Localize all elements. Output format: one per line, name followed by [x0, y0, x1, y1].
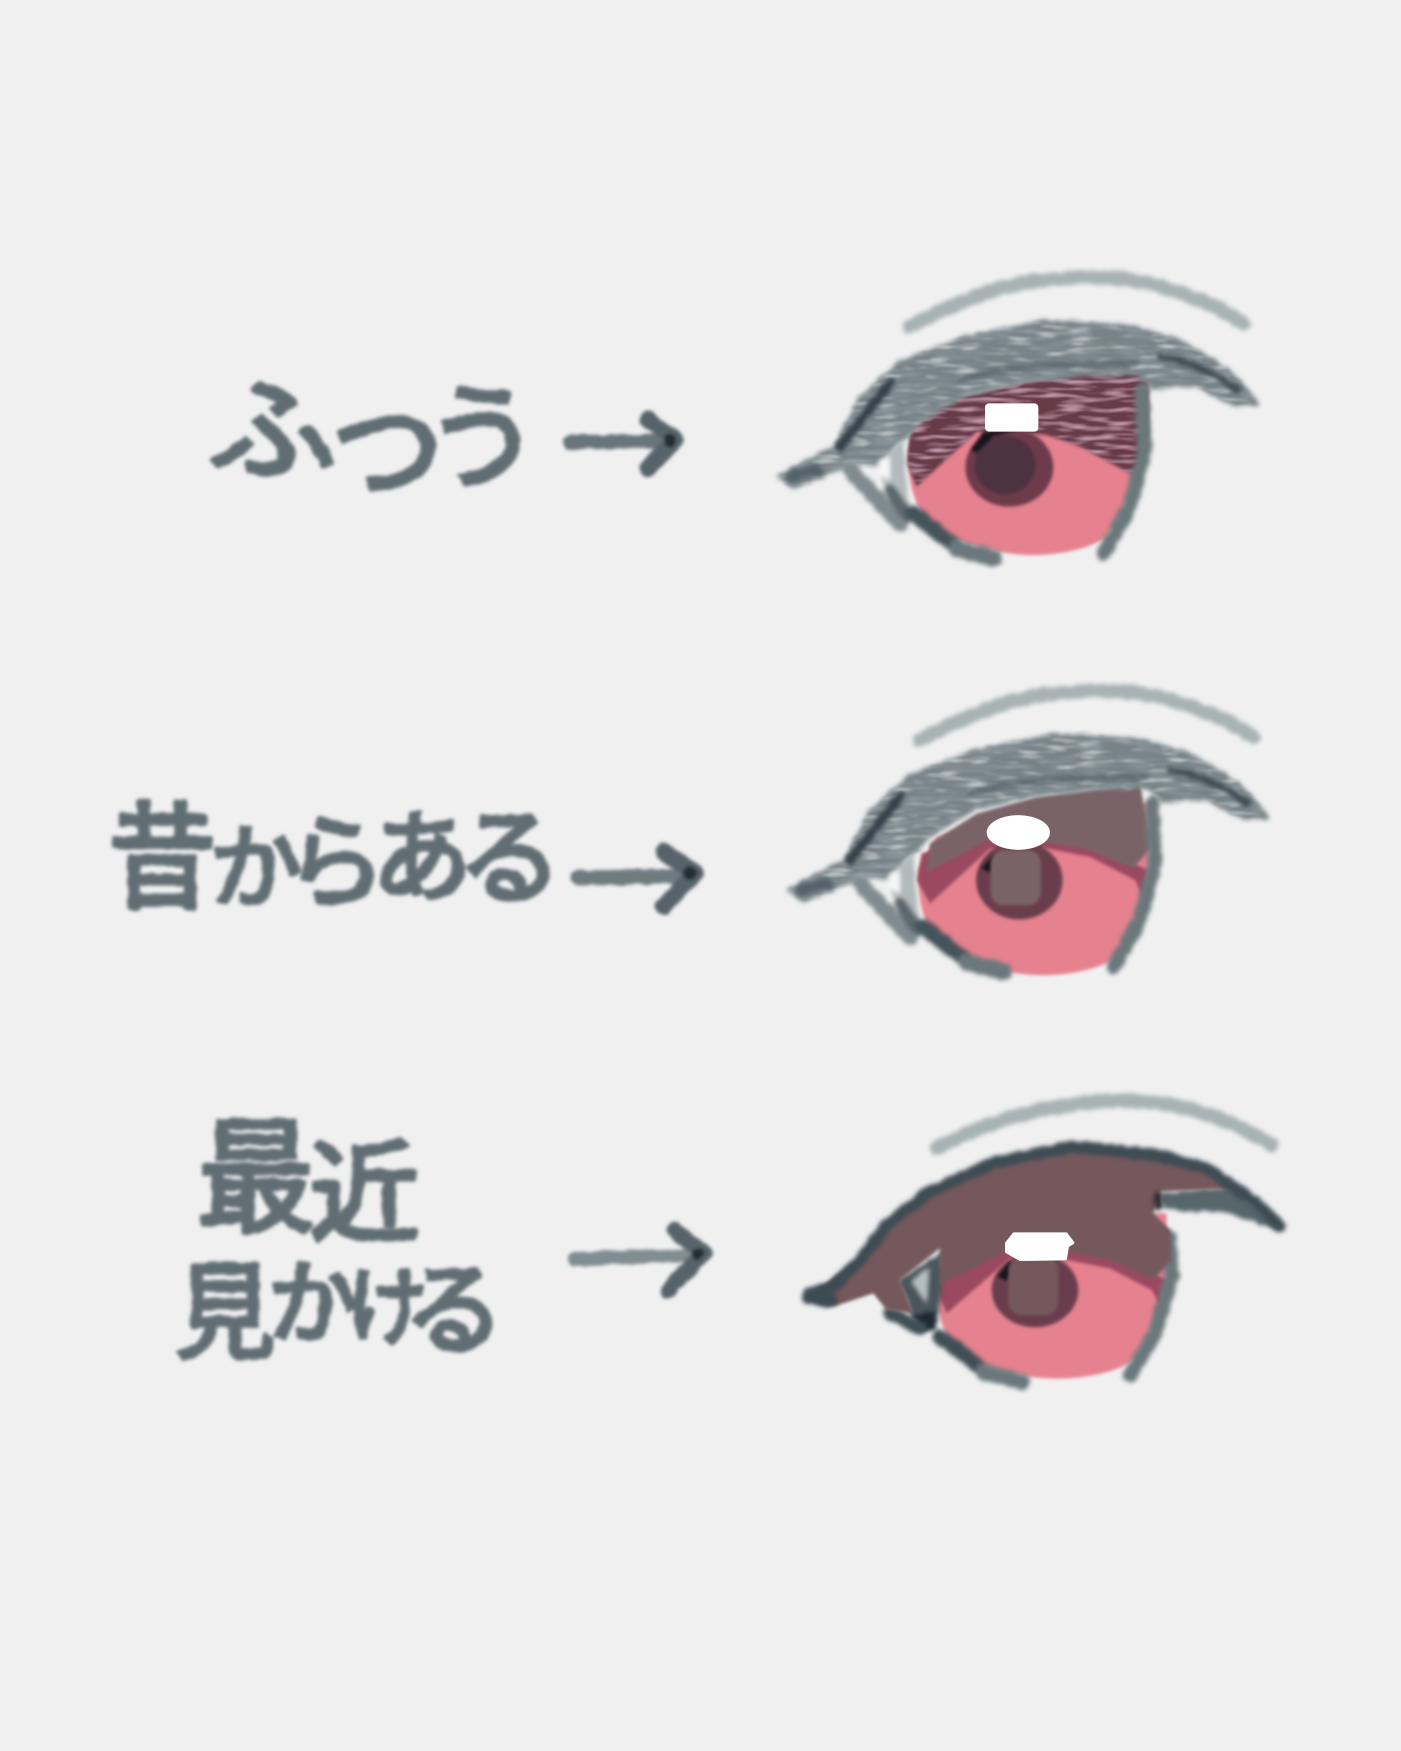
upper rose band [937, 1247, 1167, 1313]
flat eye shadow [927, 783, 1152, 872]
label: 最近見かける: け [347, 1261, 427, 1356]
eyebrow [920, 691, 1253, 740]
inner corner triangle [898, 1250, 945, 1332]
arrow: 昔からある to eye [578, 852, 697, 906]
label: 最近見かける: る [404, 1255, 504, 1367]
eye: seen recently [807, 1101, 1280, 1382]
label: ふつう [207, 369, 540, 514]
label: 最近見かける: 見 [175, 1256, 275, 1373]
inner corner and lower lash lines [850, 390, 1145, 558]
iris [976, 841, 1063, 919]
highlight [987, 815, 1050, 850]
eyebrow [910, 277, 1243, 327]
inner corner and lower lash lines [860, 803, 1155, 972]
lower lash lines [890, 1237, 1172, 1382]
label: 昔からある: る [457, 801, 562, 918]
eyebrow [937, 1101, 1272, 1148]
label: 昔からある [108, 795, 562, 923]
label: 最近見かける: か [268, 1255, 358, 1355]
arrow: 最近見かける to eye [574, 1230, 704, 1290]
iris [992, 1253, 1078, 1327]
label: 昔からある: 昔 [108, 795, 216, 923]
iris [965, 428, 1053, 507]
eyelid fill [807, 1147, 1233, 1313]
label: 昔からある: か [210, 818, 302, 920]
eye: seen for a long time [790, 691, 1267, 975]
label: 昔からある: ら [286, 808, 386, 920]
label: 昔からある: あ [372, 803, 472, 915]
flat pupil [991, 850, 1041, 905]
upper rose band [917, 833, 1148, 903]
label: ふつう: う [425, 375, 540, 503]
lash tail [1160, 1187, 1280, 1228]
highlight [1007, 1234, 1073, 1259]
highlight [985, 403, 1038, 432]
sclera [908, 383, 1140, 555]
upper eye shadow [907, 365, 1148, 487]
arrow: ふつう to eye [570, 420, 677, 468]
eyelid [790, 735, 1267, 900]
label: ふつう: つ [331, 389, 443, 514]
sclera [936, 1213, 1167, 1379]
label: 最近見かける [175, 1110, 504, 1373]
eye: normal [780, 277, 1257, 558]
eyelid [780, 322, 1257, 487]
label: 最近見かける: 近 [309, 1133, 419, 1256]
sclera [918, 803, 1150, 975]
eyelid outline [810, 1147, 1280, 1300]
flat pupil [1008, 1257, 1058, 1315]
label: ふつう: ふ [207, 369, 337, 494]
label: 最近見かける: 最 [197, 1110, 315, 1249]
